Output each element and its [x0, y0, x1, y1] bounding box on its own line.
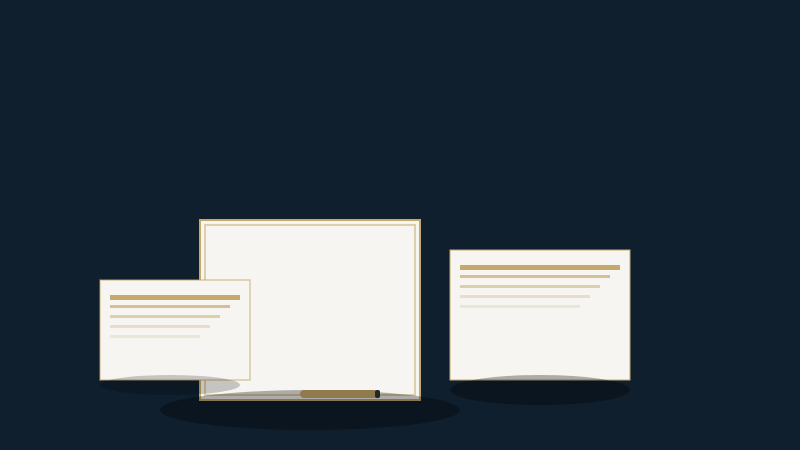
panel: right document: [450, 250, 630, 380]
panel: large center document: [200, 220, 420, 400]
right document shadow: [450, 375, 630, 405]
icon: pen: [300, 390, 380, 398]
panel: left document: [100, 280, 250, 380]
left document shadow: [100, 375, 240, 395]
center document shadow: [160, 390, 460, 430]
